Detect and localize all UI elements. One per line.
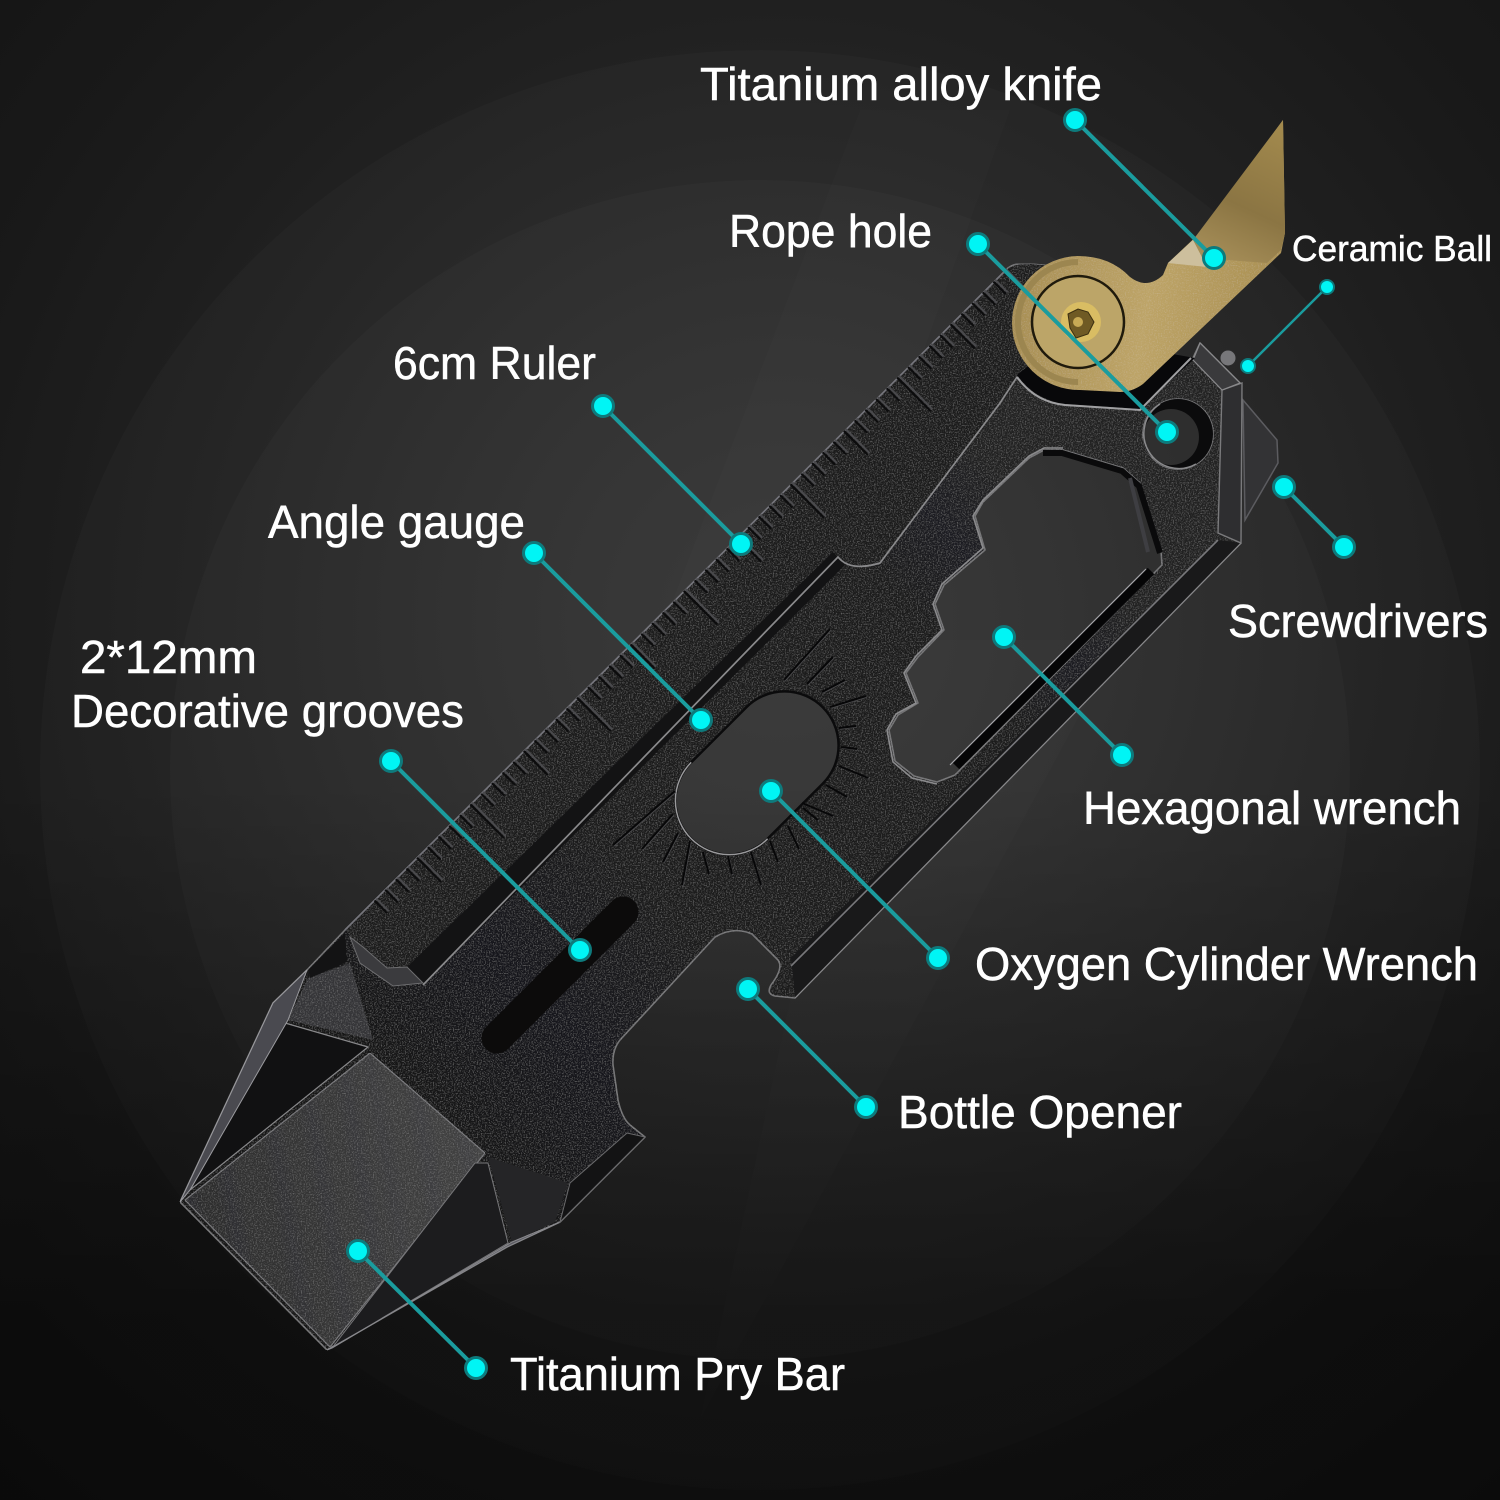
callout: Titanium alloy knife: Titanium alloy knife (700, 58, 1102, 110)
tool body with wrench, cylinder and rope holes (180, 264, 1241, 1350)
callout: Ceramic Ball: Ceramic Ball (1292, 228, 1492, 269)
callout: Titanium Pry Bar (348, 1240, 845, 1400)
small lower facet (488, 1157, 568, 1242)
head facets (1193, 343, 1242, 543)
ruler channel groove (407, 552, 845, 985)
torx screw (1061, 302, 1101, 342)
blade light facet (1168, 240, 1207, 267)
brass knife (1012, 120, 1285, 392)
ruler edge highlight (345, 268, 1008, 930)
callout: Decorative grooves (71, 631, 590, 960)
screwdriver tip (1243, 400, 1278, 520)
callout: Rope hole (729, 205, 1178, 442)
callout: 6cm Ruler (393, 337, 752, 554)
blade face (1193, 120, 1285, 267)
wrench groove wall (956, 571, 1151, 766)
main pry face (185, 1053, 485, 1347)
callout: Rope hole: Rope hole (729, 205, 932, 257)
pivot ring (1032, 276, 1124, 368)
disc bevel (1018, 262, 1078, 382)
strip bright line (791, 540, 1218, 966)
hex wrench opening rim (1043, 453, 1160, 553)
rope hole wall (1143, 399, 1213, 469)
ruler channel bevel (350, 937, 423, 986)
callout: Decorative grooves: Decorative grooves (71, 685, 464, 737)
multi-tool illustration (180, 120, 1285, 1350)
right side bevel strip (791, 540, 1241, 998)
left edge highlight (180, 970, 307, 1202)
callout: Hexagonal wrench (994, 626, 1461, 834)
callout: Oxygen Cylinder Wrench: Oxygen Cylinder Wrench (975, 938, 1478, 990)
callout: Ceramic Ball (1241, 228, 1492, 373)
rope hole rim highlight (1144, 404, 1196, 468)
angle gauge sunburst (613, 629, 869, 886)
callout: Angle gauge (268, 496, 712, 730)
decorative groove slot (497, 912, 623, 1038)
callout: Bottle Opener (738, 978, 1182, 1138)
cylinder wrench lower rim highlight (675, 762, 768, 855)
channel bright edge (423, 377, 1017, 985)
knife handle and pivot disc (1012, 120, 1285, 392)
callout: Oxygen Cylinder Wrench (760, 780, 1478, 990)
pry bar head (180, 933, 645, 1350)
lower dark facet (332, 1163, 508, 1348)
callout: Titanium Pry Bar: Titanium Pry Bar (510, 1348, 845, 1400)
head ring highlight (1017, 358, 1191, 410)
callout: Angle gauge: Angle gauge (268, 496, 525, 548)
ruler scale ticks (371, 275, 1023, 927)
strip outer edge (795, 543, 1241, 998)
callout: Screwdrivers (1228, 476, 1488, 647)
callout: Hexagonal wrench: Hexagonal wrench (1083, 782, 1461, 834)
wrench groove highlight (950, 569, 1146, 765)
ruler channel (345, 264, 1100, 968)
oxygen cylinder wrench rim (675, 691, 839, 855)
shadow gap under knife (1017, 340, 1195, 409)
wrench opening highlight (887, 448, 1063, 784)
bottom edge highlight (327, 1222, 560, 1350)
ceramic ball (1220, 350, 1236, 366)
top strip (308, 933, 347, 978)
callout: Bottle Opener: Bottle Opener (898, 1086, 1182, 1138)
callout: Titanium alloy knife (700, 58, 1224, 268)
upper dark facet (190, 1023, 368, 1190)
callout: 6cm Ruler: 6cm Ruler (393, 337, 596, 389)
hex opening inner wall (1130, 478, 1148, 552)
lower right strip (560, 1133, 645, 1222)
upper grey facet (288, 963, 373, 1040)
callout: Screwdrivers: Screwdrivers (1228, 595, 1488, 647)
callout: Decorative grooves: 2*12mm (80, 631, 257, 683)
